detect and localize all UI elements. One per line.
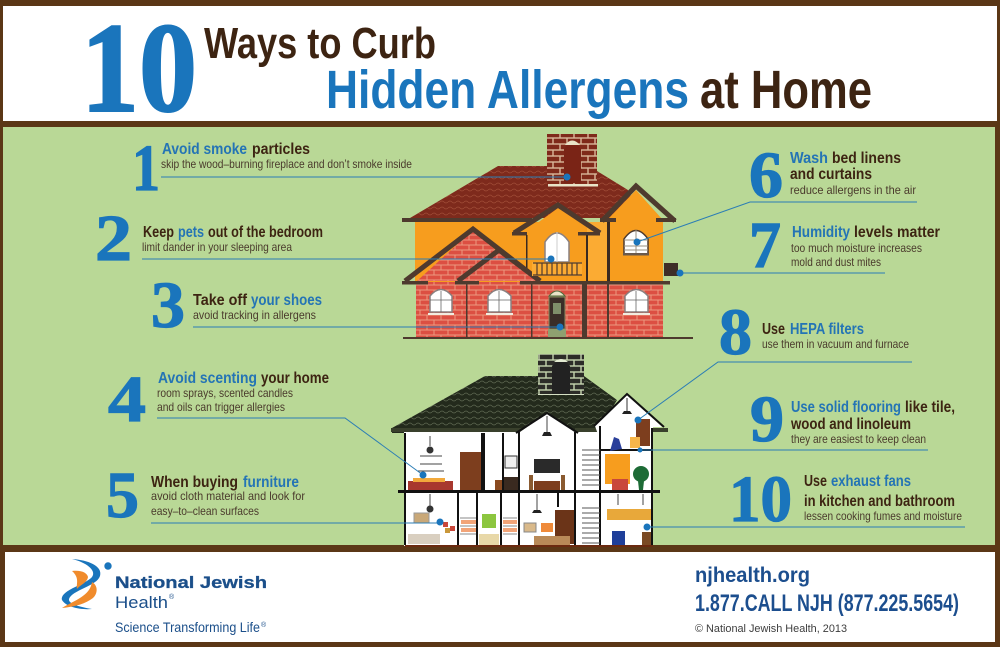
stairs upper [582, 450, 600, 485]
item 9: 9 [750, 383, 784, 456]
roof [392, 376, 617, 433]
bathroom upper [495, 456, 518, 490]
item 3: 3 [151, 269, 185, 342]
item 8 [634, 296, 912, 424]
item 2: limit dander in your sleeping area [142, 240, 292, 254]
balcony window and railing [532, 232, 582, 276]
item 4: Avoid scenting [158, 370, 257, 387]
footer contact: njhealth.org [695, 564, 810, 587]
item 10: in kitchen and bathroom [804, 493, 955, 510]
item 5: 5 [106, 459, 139, 532]
item 3: Take off [193, 292, 248, 309]
lower storey brick wall [416, 282, 663, 337]
item 3 [151, 269, 564, 342]
item 6: bed linens [832, 150, 901, 167]
item 2: 2 [95, 202, 132, 275]
interior walls [404, 432, 653, 546]
item 4: and oils can trigger allergies [157, 400, 285, 414]
item 9: wood and linoleum [790, 416, 911, 433]
stairs lower [582, 508, 600, 543]
item 6: Wash [790, 150, 828, 167]
item 5 [106, 459, 444, 532]
upper storey wall [415, 222, 663, 282]
AC unit [664, 263, 678, 276]
item 1: particles [252, 141, 310, 158]
item 5: furniture [243, 474, 299, 491]
item 9: they are easiest to keep clean [791, 432, 926, 446]
footer logo: Health [115, 593, 168, 612]
shelves and green art [460, 514, 517, 545]
item 8: use them in vacuum and furnace [762, 337, 909, 351]
item 4: 4 [108, 363, 146, 436]
item 7: too much moisture increases [791, 241, 922, 255]
bedroom lower [408, 494, 455, 544]
footer contact [695, 564, 959, 635]
title: 10 [81, 0, 197, 139]
icon: helix [62, 559, 112, 609]
item 3: your shoes [251, 292, 322, 309]
roof [410, 166, 640, 218]
item 6: reduce allergens in the air [790, 183, 916, 197]
living room upper [529, 416, 565, 490]
item 7: Humidity [792, 224, 850, 241]
item 1 [132, 132, 570, 205]
structure lines [405, 394, 664, 545]
bedroom upper [408, 436, 481, 490]
item 4 [108, 363, 426, 478]
footer logo: Science Transforming Life [115, 619, 260, 635]
item 10: 10 [729, 463, 792, 536]
footer logo: ® [261, 621, 267, 629]
item 10: exhaust fans [831, 473, 911, 490]
item 2 [95, 202, 554, 275]
upper right window [623, 230, 649, 256]
item 7: 7 [749, 209, 781, 282]
item 9 [638, 383, 955, 456]
front door [548, 291, 566, 337]
logo text: National Jewish [115, 573, 267, 592]
item 6: 6 [749, 139, 783, 212]
item 3: avoid tracking in allergens [193, 308, 316, 322]
item 10 [644, 463, 965, 536]
footer logo [62, 559, 267, 635]
title [81, 0, 872, 139]
footer contact: © National Jewish Health, 2013 [695, 623, 847, 635]
title: Hidden Allergens [326, 60, 689, 120]
item 2: Keep [143, 224, 174, 241]
item 2: out of the bedroom [208, 224, 323, 241]
item 7 [676, 209, 940, 282]
item 1: skip the wood–burning fireplace and don’t smoke inside [161, 157, 412, 171]
item 6: and curtains [790, 166, 872, 183]
item 7: mold and dust mites [791, 255, 881, 269]
lower windows [428, 290, 650, 315]
attic [610, 398, 650, 451]
foundation [405, 545, 653, 547]
illustration: upper house exterior [402, 134, 693, 339]
kitchen [607, 494, 651, 545]
item 8: HEPA filters [790, 321, 864, 338]
item 9: like tile, [905, 399, 955, 416]
illustration: lower house cutaway [391, 354, 668, 547]
item 1: 1 [132, 132, 160, 205]
item 2: pets [178, 224, 204, 241]
item 5: When buying [151, 474, 238, 491]
chimney [547, 134, 597, 184]
item 5: avoid cloth material and look for [151, 489, 305, 503]
item 8: Use [762, 321, 785, 338]
title: Ways to Curb [204, 19, 436, 68]
item 10: lessen cooking fumes and moisture [804, 509, 962, 523]
item 8: 8 [719, 296, 752, 369]
upper gables [402, 186, 676, 282]
footer logo: ® [169, 593, 175, 601]
lower gables [402, 229, 670, 337]
item 9: Use solid flooring [791, 399, 901, 416]
item 4: room sprays, scented candles [157, 386, 293, 400]
room with curtain and plant [605, 454, 649, 490]
title: at Home [700, 60, 872, 120]
living room lower [524, 494, 574, 545]
item 1: Avoid smoke [162, 141, 247, 158]
item 10: Use [804, 473, 827, 490]
item 6 [634, 139, 917, 246]
chimney [535, 354, 585, 396]
item 7: levels matter [854, 224, 940, 241]
item 4: your home [261, 370, 329, 387]
item 5: easy–to–clean surfaces [151, 504, 259, 518]
ground line [403, 337, 693, 339]
